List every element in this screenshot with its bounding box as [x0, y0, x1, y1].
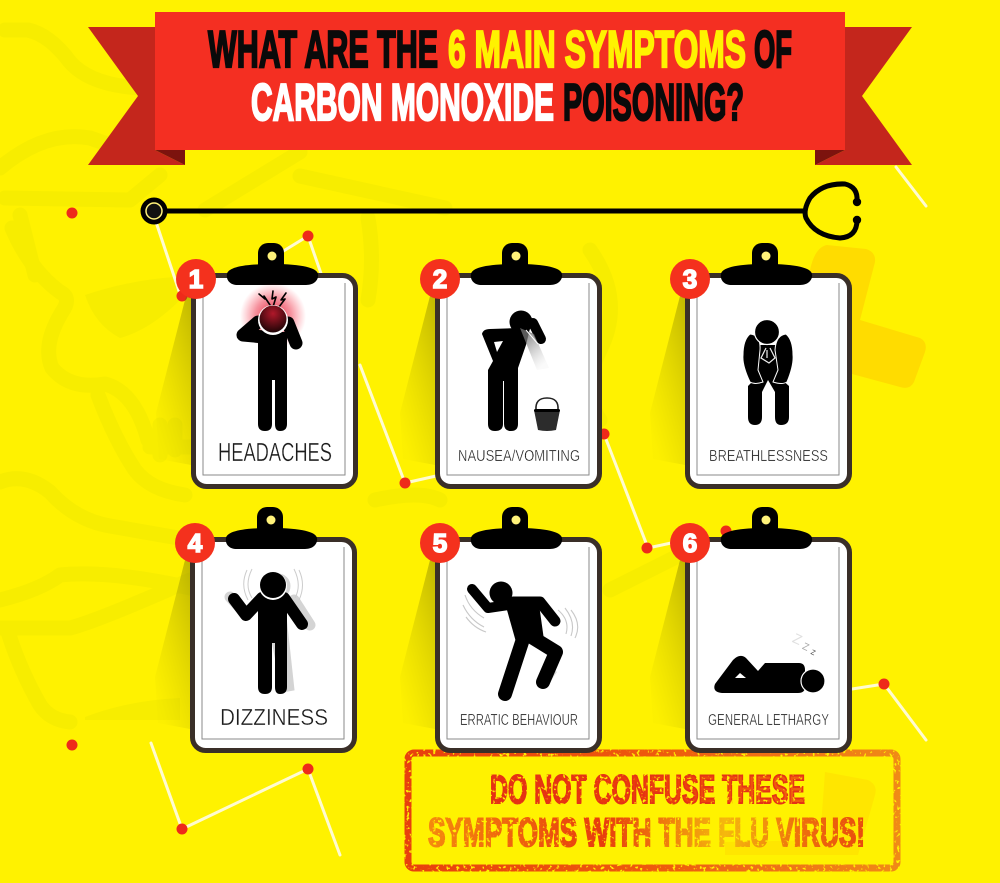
- card 2: nausea: [400, 243, 600, 486]
- icon: person lying down asleep: Z: [800, 641, 810, 654]
- number badge: 4: [188, 528, 203, 558]
- background: skull outline pattern: [0, 30, 680, 722]
- number badge: [176, 259, 216, 299]
- icon: person lying down asleep: [714, 630, 825, 693]
- icon: person vomiting into a bucket: [482, 310, 560, 431]
- clipboard: [400, 507, 600, 750]
- warning stamp: [408, 753, 897, 868]
- title ribbon: [88, 12, 912, 165]
- card 1: headaches: [156, 243, 356, 486]
- number badge: 1: [189, 264, 203, 294]
- ribbon main band: [155, 12, 845, 150]
- icon: dizzy person: [230, 569, 310, 694]
- clipboard: [156, 243, 356, 486]
- number badge: 2: [433, 264, 447, 294]
- number badge: [420, 259, 460, 299]
- card 4: dizziness: [155, 507, 354, 750]
- ribbon left tail: [88, 27, 185, 165]
- title line 1: WHAT ARE THE: [208, 21, 438, 79]
- icon: person lying down asleep: Z: [809, 649, 817, 658]
- number badge: [670, 259, 710, 299]
- title line 1: [208, 21, 792, 79]
- card 3: breathlessness: [650, 243, 850, 486]
- card 6: general lethargy: [650, 507, 850, 750]
- icon: person with headache: [240, 283, 306, 431]
- background: white network lines with red dots: [66, 167, 926, 855]
- title line 1: OF: [754, 21, 792, 79]
- label: NAUSEA/VOMITING: [458, 448, 580, 465]
- label: BREATHLESSNESS: [709, 448, 828, 465]
- title line 2: POISONING?: [563, 74, 744, 132]
- stamp text: [428, 768, 865, 855]
- number badge: 3: [683, 264, 697, 294]
- ribbon right tail: [815, 27, 912, 165]
- clipboard: [650, 243, 850, 486]
- background: orange plaster shapes: [725, 245, 926, 855]
- number badge: [670, 523, 710, 563]
- stethoscope divider: [140, 184, 861, 238]
- icon: person moving erratically: [463, 582, 578, 694]
- stamp text: DO NOT CONFUSE THESE: [490, 768, 805, 812]
- clipboard: [400, 243, 600, 486]
- label: ERRATIC BEHAVIOUR: [460, 712, 578, 729]
- card 5: erratic behaviour: [400, 507, 600, 750]
- label: GENERAL LETHARGY: [708, 712, 829, 729]
- clipboard: [155, 507, 354, 750]
- stamp border: [408, 753, 897, 868]
- icon: person lying down asleep: Z: [790, 630, 805, 648]
- number badge: [175, 523, 215, 563]
- title line 2: CARBON MONOXIDE: [251, 74, 554, 132]
- icon: person hunched and breathless: [743, 320, 793, 425]
- clipboard: [650, 507, 850, 750]
- number badge: [420, 523, 460, 563]
- label: HEADACHES: [218, 437, 332, 467]
- title line 1: 6 MAIN SYMPTOMS: [448, 21, 746, 79]
- number badge: 5: [433, 528, 447, 558]
- ribbon folds: [155, 150, 845, 165]
- label: DIZZINESS: [220, 704, 328, 730]
- number badge: 6: [683, 528, 697, 558]
